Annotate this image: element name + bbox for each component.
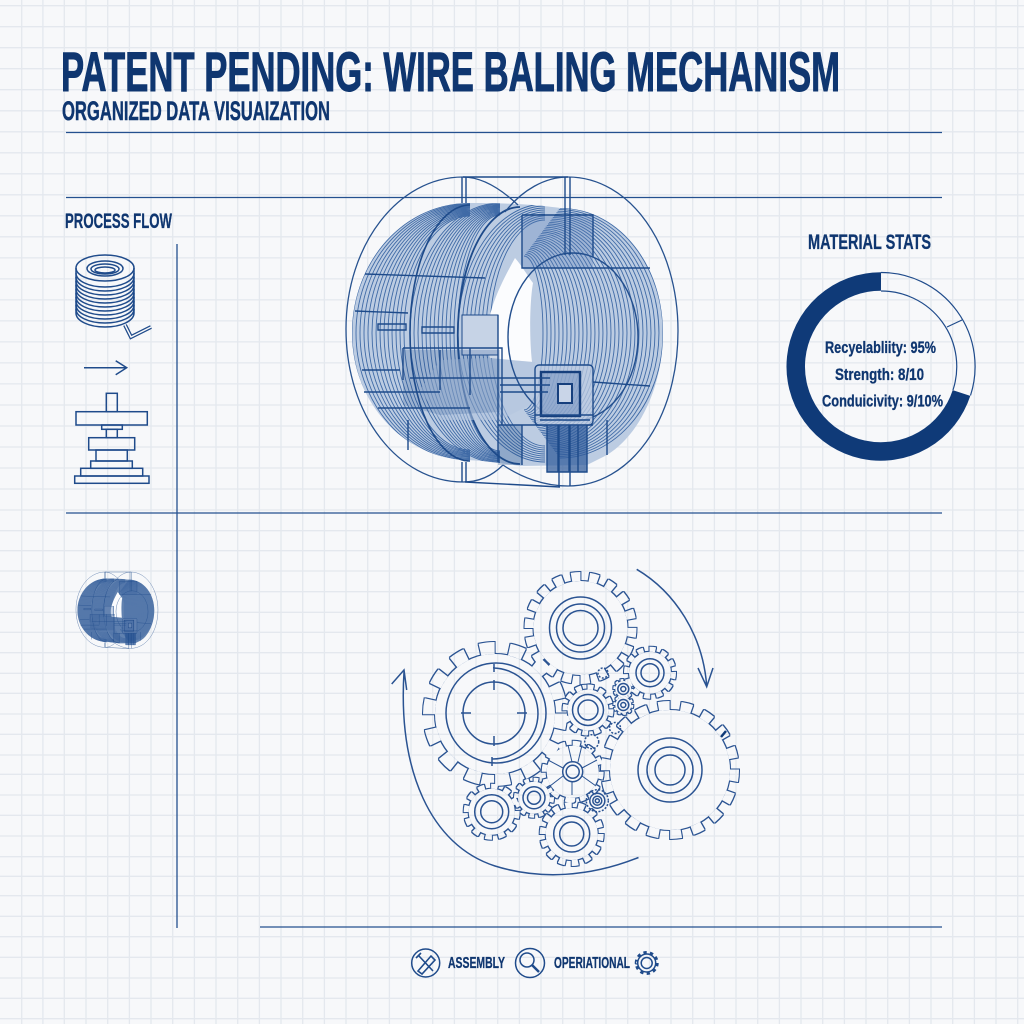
thumbnail: mini wire coil bbox=[76, 572, 158, 649]
arrow: process direction bbox=[84, 361, 127, 375]
gear silhouettes bbox=[429, 576, 734, 863]
arrow: clockwise top right bbox=[637, 569, 713, 687]
process flow heading: PROCESS FLOW bbox=[65, 210, 172, 233]
panel: material stats bbox=[796, 231, 975, 451]
legend bbox=[412, 948, 657, 978]
stat: conductivity: Conduicivity: 9/10% bbox=[822, 392, 943, 410]
diagram: gear train bbox=[392, 569, 734, 875]
icon: press machine bbox=[75, 393, 149, 483]
icon: tools bbox=[412, 949, 440, 977]
arrow: curved lower left bbox=[392, 670, 638, 875]
donut chart bbox=[796, 272, 975, 451]
stat: recyclability: Recyelabliity: 95% bbox=[825, 338, 936, 357]
label: operational: OPERIATIONAL bbox=[554, 955, 630, 972]
icon: magnifier bbox=[516, 948, 544, 978]
icon: wire coil bbox=[76, 255, 151, 337]
icon: gear bbox=[636, 952, 657, 974]
diagram: main wire coil cutaway bbox=[346, 177, 678, 487]
label: assembly: ASSEMBLY bbox=[448, 955, 505, 972]
subtitle: ORGANIZED DATA VISUAIZATION bbox=[62, 96, 330, 126]
stat: strength: Strength: 8/10 bbox=[835, 365, 924, 384]
material stats heading: MATERIAL STATS bbox=[808, 231, 931, 254]
panel: process flow bbox=[65, 210, 172, 483]
gear hubs bbox=[446, 597, 726, 852]
